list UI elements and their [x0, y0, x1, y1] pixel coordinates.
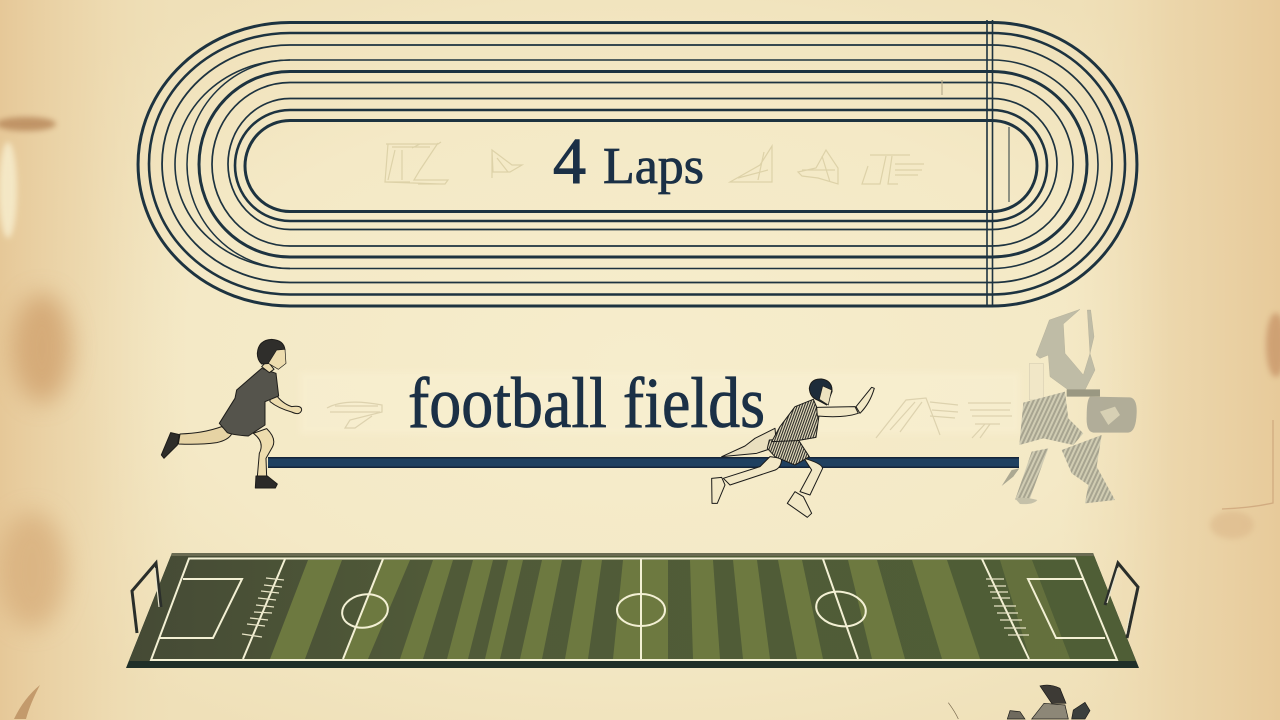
body — [1032, 703, 1068, 719]
upper body — [1036, 309, 1095, 390]
rear leg — [1062, 435, 1115, 503]
running track — [138, 20, 1137, 306]
back shoe — [712, 477, 725, 503]
shorts — [767, 438, 809, 465]
shoulder left — [1007, 711, 1025, 719]
back leg — [723, 457, 782, 485]
heading: 4 Laps: 4 — [553, 125, 586, 198]
front shoe — [255, 476, 277, 488]
arm and stick — [817, 407, 858, 417]
right goal — [1105, 563, 1138, 638]
face — [819, 386, 832, 405]
faint glyphs inside the track — [385, 80, 942, 184]
skirt — [1019, 392, 1083, 445]
faint glyphs in the football row — [327, 398, 1012, 438]
football field — [126, 553, 1139, 668]
back foot trace — [1002, 468, 1019, 486]
shield — [1087, 397, 1137, 433]
pitch base — [126, 553, 1139, 668]
figure: second runner — [712, 379, 874, 517]
grass blade — [948, 703, 958, 719]
lane lines — [138, 22, 1137, 306]
helmet — [1040, 685, 1066, 703]
front leg — [253, 429, 274, 477]
left goal — [132, 563, 161, 633]
progress bar — [268, 457, 1019, 468]
torso and shorts — [219, 368, 279, 436]
arm — [270, 393, 302, 414]
figure: first runner — [161, 339, 302, 488]
front leg — [1015, 448, 1048, 500]
back shoe — [161, 433, 179, 458]
face — [268, 349, 286, 369]
heading: 4 Laps — [553, 125, 704, 198]
figure: faded warrior — [1002, 309, 1137, 504]
heading: 4 Laps: Laps — [603, 138, 704, 195]
back leg — [178, 427, 232, 444]
front leg — [800, 458, 823, 495]
mown stripes — [270, 560, 1070, 659]
head — [809, 379, 832, 405]
partial figure at bottom edge — [948, 685, 1090, 719]
pale panel — [1029, 363, 1043, 400]
pitch markings — [151, 558, 1117, 660]
neck — [262, 361, 274, 373]
hair — [257, 339, 285, 364]
heading: football fields: football fields — [408, 363, 765, 443]
hash marks — [242, 578, 1029, 637]
finish lines — [987, 20, 1009, 305]
front shoe — [787, 492, 812, 517]
torso — [772, 399, 819, 442]
cape — [722, 428, 777, 457]
shoulder right — [1072, 702, 1090, 719]
